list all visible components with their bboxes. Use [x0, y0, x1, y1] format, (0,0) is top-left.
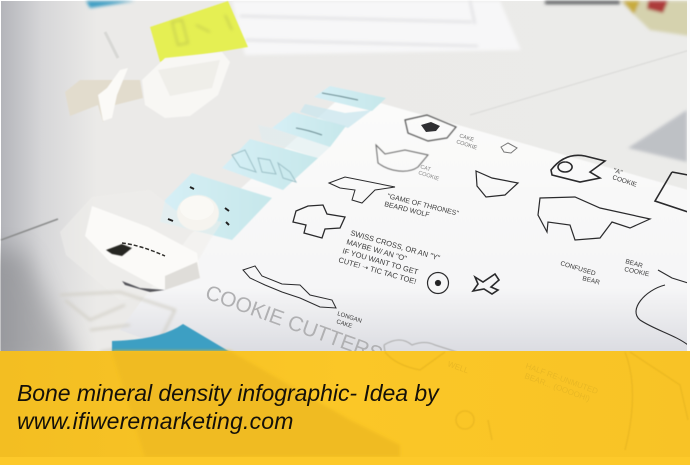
handwritten labels: SWISS CROSS, OR AN "Y" [349, 228, 441, 263]
handwritten labels: COOKIE [624, 266, 650, 278]
sketch: cat cookie [376, 145, 428, 171]
handwritten labels: COOKIE [611, 174, 638, 189]
handwritten labels: BEAR [581, 275, 601, 287]
handwritten labels: BEAR [624, 258, 644, 270]
white cookie cutter, foreground [60, 187, 229, 300]
caption text: www.ifiweremarketing.com [17, 408, 294, 434]
sticky note scribbles [232, 93, 358, 182]
handwritten labels: CUTE! ➝ TIC TAC TOE! [337, 255, 417, 286]
desk background [0, 1, 690, 370]
handwritten labels: CONFUSED [559, 260, 597, 278]
yellow sticky note [150, 1, 248, 62]
drawing paper [120, 93, 688, 352]
handwritten labels: MAYBE W/ AN "O" [345, 237, 408, 263]
blue sticky notes [160, 86, 386, 240]
caption text [17, 380, 440, 434]
handwritten labels: IF YOU WANT TO GET [341, 246, 420, 277]
yellow caption band: HALF RE-UNMUTED [524, 361, 599, 396]
sketch: letter b [655, 172, 688, 212]
handwritten labels: COOKIE [455, 139, 478, 152]
handwritten labels: CAKE [335, 319, 353, 330]
sketch: bear [538, 197, 650, 240]
sketch: confused bear [636, 270, 688, 345]
yellow caption band: WELL [446, 359, 470, 376]
sketch: ring [428, 272, 448, 294]
handwritten labels: BEARD WOLF [384, 201, 430, 219]
white right edge above band [687, 0, 690, 351]
handwritten labels: CAT [419, 164, 432, 173]
sketch: small x [473, 274, 499, 294]
handwritten labels: CAKE [458, 133, 475, 144]
sketch: letter a [551, 155, 605, 182]
yellow caption band: BEAR... (OOOOH!) [523, 371, 591, 404]
yellow caption band [0, 351, 690, 465]
blurred white cookie cutter, top left [65, 32, 230, 122]
sketch: long cookie [243, 266, 336, 308]
sketch: cross [293, 205, 345, 238]
background papers, top [86, 1, 690, 55]
sketch: helmet [476, 171, 518, 197]
sketch: dragon wolf [329, 177, 395, 203]
caption text: Bone mineral density infographic- Idea by [17, 380, 439, 406]
handwritten labels: "GAME OF THRONES" [387, 193, 460, 218]
sketches [243, 115, 688, 352]
sketch: duck [384, 340, 457, 352]
handwritten labels: "A" [612, 167, 624, 177]
handwritten labels: COOKIE CUTTERS [202, 281, 386, 367]
handwritten labels: LONGAN [336, 311, 362, 325]
faint cutter shapes, lower left [60, 292, 175, 352]
handwritten labels [202, 133, 650, 367]
handwritten labels: COOKIE [417, 170, 440, 183]
blue paper corner [112, 324, 230, 352]
sketch: hexagon [405, 115, 517, 153]
